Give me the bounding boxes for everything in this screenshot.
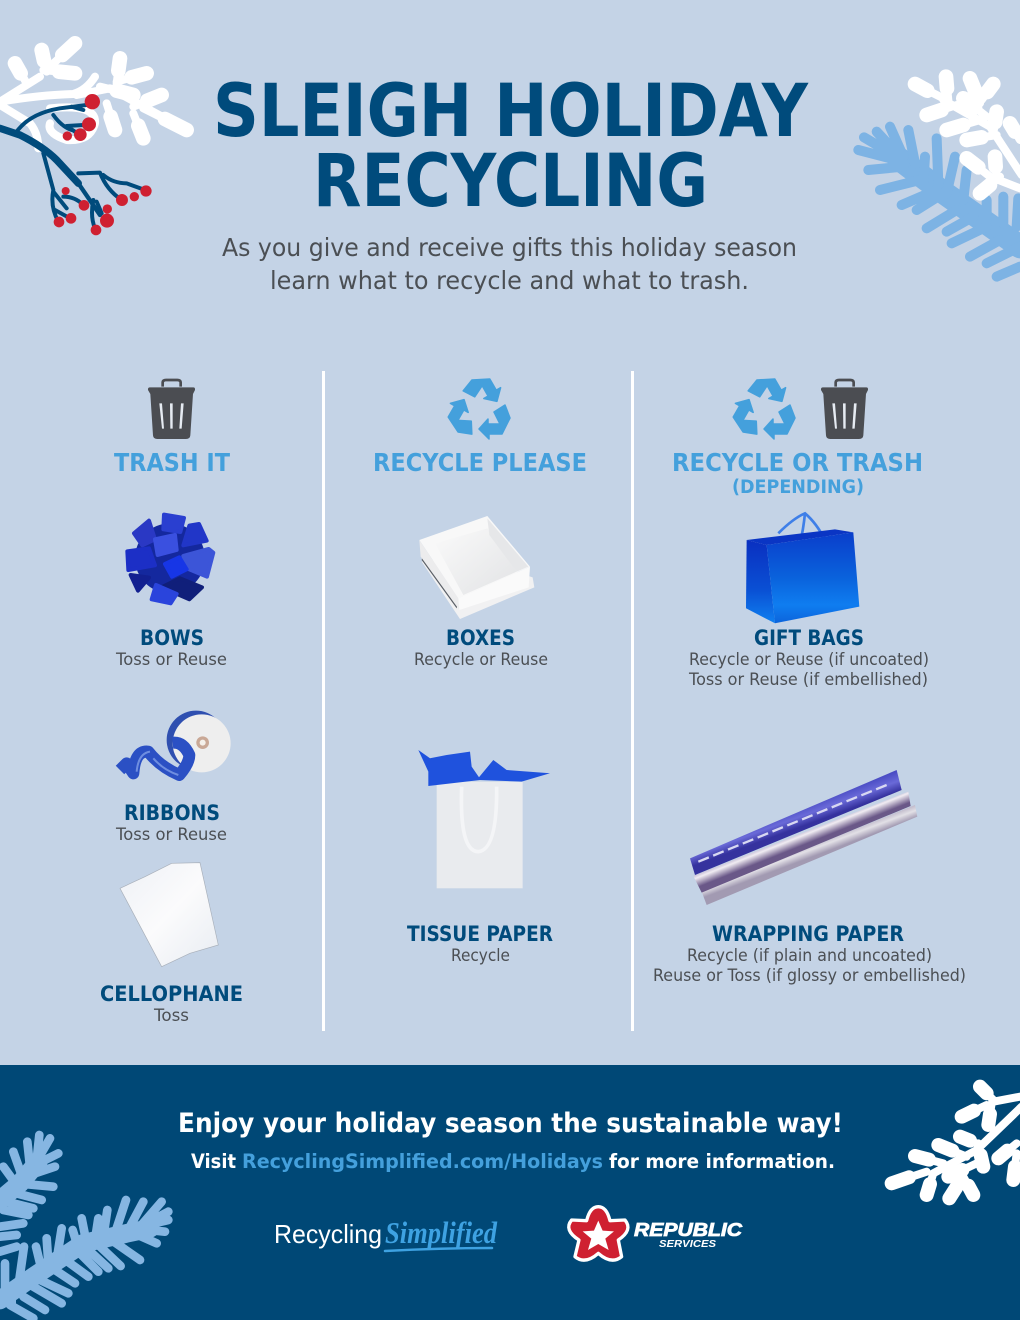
note: bows: Toss or Reuse: [115, 650, 227, 669]
decoration: blue pine branch top right: [858, 127, 1020, 277]
wordmark: services: SERVICES: [659, 1239, 716, 1250]
heading: recycle please: RECYCLE PLEASE: [373, 448, 587, 477]
logo: recycling simplified: Simplified: [385, 1215, 497, 1250]
logo: republic services: [569, 1207, 743, 1260]
label: bows: BOWS: [140, 626, 204, 651]
column dividers: [322, 371, 634, 1031]
note: ribbons: Toss or Reuse: [115, 825, 227, 844]
decoration: white branch top left: [0, 43, 187, 148]
note: gift bags line 1: Recycle or Reuse (if uncoated): [689, 650, 929, 669]
note: gift bags line 2: Toss or Reuse (if embellished): [688, 670, 928, 689]
photo: cellophane sheets: [120, 863, 218, 967]
decoration: berry branch top left: [0, 94, 152, 235]
photo: wrapping paper rolls: [690, 770, 917, 905]
heading: recycle or trash: RECYCLE OR TRASH: [672, 448, 923, 477]
note: wrapping paper line 1: Recycle (if plain and uncoated): [687, 946, 932, 965]
photo: blue bow: [127, 515, 213, 603]
footer call to action: [191, 1150, 835, 1173]
photo: ribbon roll: [120, 711, 231, 775]
item: tissue paper: [407, 750, 553, 965]
title: [213, 69, 809, 224]
footer band: [0, 1065, 1020, 1320]
note: tissue paper: Recycle: [451, 946, 510, 965]
icon: trash can: [148, 380, 195, 439]
label: cellophane: CELLOPHANE: [100, 982, 243, 1007]
icon: recycle symbol: [725, 370, 795, 439]
title: SLEIGH HOLIDAY: [213, 69, 809, 154]
footer call to action: for more information.: [609, 1150, 835, 1173]
subtitle: [222, 233, 797, 295]
subtitle: learn what to recycle and what to trash.: [270, 266, 749, 295]
footer headline: Enjoy your holiday season the sustainable way!: [178, 1108, 843, 1139]
photo: white bag with blue tissue: [418, 750, 550, 888]
photo: white box: [419, 516, 534, 619]
item: wrapping paper: [653, 770, 966, 985]
column: recycle please: [373, 370, 587, 965]
icon: red star: [569, 1207, 628, 1260]
title: RECYCLING: [313, 139, 708, 224]
label: boxes: BOXES: [446, 626, 515, 651]
subtitle: As you give and receive gifts this holiday season: [222, 233, 797, 262]
footer call to action: Visit: [191, 1150, 236, 1173]
item: ribbons: [115, 711, 231, 844]
note: cellophane: Toss: [153, 1006, 189, 1025]
logo: recycling simplified: [274, 1215, 497, 1251]
label: tissue paper: TISSUE PAPER: [407, 922, 553, 947]
decoration: white branch top right: [915, 77, 1020, 193]
icon: recycle symbol: [440, 370, 510, 439]
subheading: depending: (DEPENDING): [732, 477, 864, 498]
item: bows: [115, 515, 227, 669]
column: trash it: [100, 380, 243, 1025]
icon: trash can: [821, 380, 868, 439]
decoration: pine branches bottom left: [0, 1135, 168, 1318]
footer call to action: RecyclingSimplified.com/Holidays: [242, 1150, 603, 1173]
decoration: white branch bottom right: [892, 1087, 1020, 1198]
item: boxes: [414, 516, 548, 669]
label: wrapping paper: WRAPPING PAPER: [712, 922, 904, 947]
heading: trash it: TRASH IT: [114, 448, 230, 477]
label: ribbons: RIBBONS: [124, 801, 220, 826]
label: gift bags: GIFT BAGS: [754, 626, 864, 651]
note: wrapping paper line 2: Reuse or Toss (if glossy or embellished): [653, 966, 966, 985]
note: boxes: Recycle or Reuse: [414, 650, 548, 669]
wordmark: republic: REPUBLIC: [634, 1220, 743, 1240]
item: cellophane: [100, 863, 243, 1025]
logo: recycling simplified: Recycling: [274, 1219, 382, 1249]
item: gift bags: [688, 513, 929, 689]
column: recycle or trash: [653, 370, 966, 985]
photo: blue gift bag: [746, 513, 859, 623]
